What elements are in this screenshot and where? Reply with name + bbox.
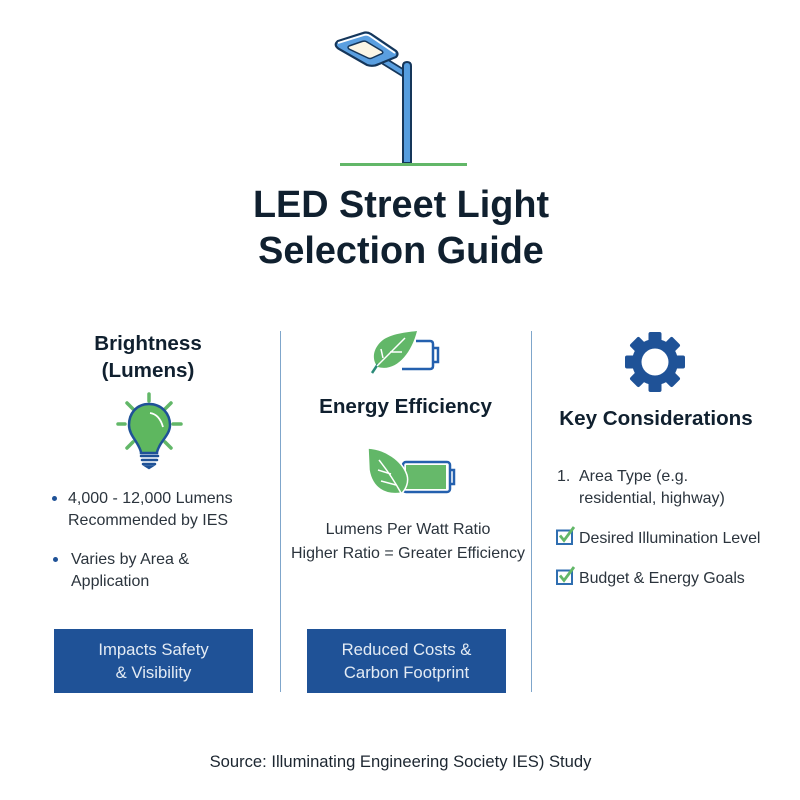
heading: brightness: Brightness: [94, 332, 202, 355]
bullet: varies: Varies by Area &: [71, 551, 189, 568]
callout: costs: [307, 629, 506, 693]
icon: leaf and full battery: [368, 448, 456, 494]
heading: brightness: [94, 332, 202, 382]
bullet: lumens: 4,000 - 12,000 Lumens: [68, 490, 233, 507]
callout: safety: Impacts Safety: [98, 640, 209, 659]
source note: Source: Illuminating Engineering Society IES) Study: [210, 752, 591, 771]
ratio text: [291, 521, 525, 562]
ratio text: Lumens Per Watt Ratio: [326, 521, 490, 538]
divider right: [531, 331, 532, 692]
heading: key considerations: Key Considerations: [559, 407, 753, 430]
bullet: lumens: [52, 490, 233, 529]
panel: energy efficiency: [291, 331, 525, 562]
bullet: lumens: Recommended by IES: [68, 512, 228, 529]
icon: leaf and empty battery: [371, 331, 440, 374]
title: Selection Guide: [258, 230, 544, 272]
icon: light bulb: [116, 392, 183, 470]
title: LED Street Light: [253, 184, 549, 226]
callout: safety: [54, 629, 253, 693]
panel: key considerations: residential, highway): [579, 490, 725, 507]
list item: area type: [557, 468, 725, 507]
bullet: varies: Application: [71, 573, 149, 590]
bullet: varies: [53, 551, 189, 590]
panel: brightness: [52, 332, 233, 590]
title: [253, 184, 549, 272]
panel: key considerations: Area Type (e.g.: [579, 468, 688, 485]
heading: brightness: (Lumens): [102, 359, 194, 382]
callout: costs: Carbon Footprint: [344, 663, 469, 682]
list item: budget: Budget & Energy Goals: [579, 570, 745, 587]
icon: gear: [625, 332, 685, 392]
list item: area type: 1.: [557, 468, 570, 485]
ratio text: Higher Ratio = Greater Efficiency: [291, 545, 525, 562]
heading: energy efficiency: Energy Efficiency: [319, 395, 492, 418]
callout: costs: Reduced Costs &: [342, 640, 471, 659]
panel: key considerations: [556, 332, 760, 587]
divider left: [280, 331, 281, 692]
callout: safety: & Visibility: [116, 663, 191, 682]
icon: street light: [334, 31, 467, 166]
list item: illumination: Desired Illumination Level: [579, 530, 760, 547]
